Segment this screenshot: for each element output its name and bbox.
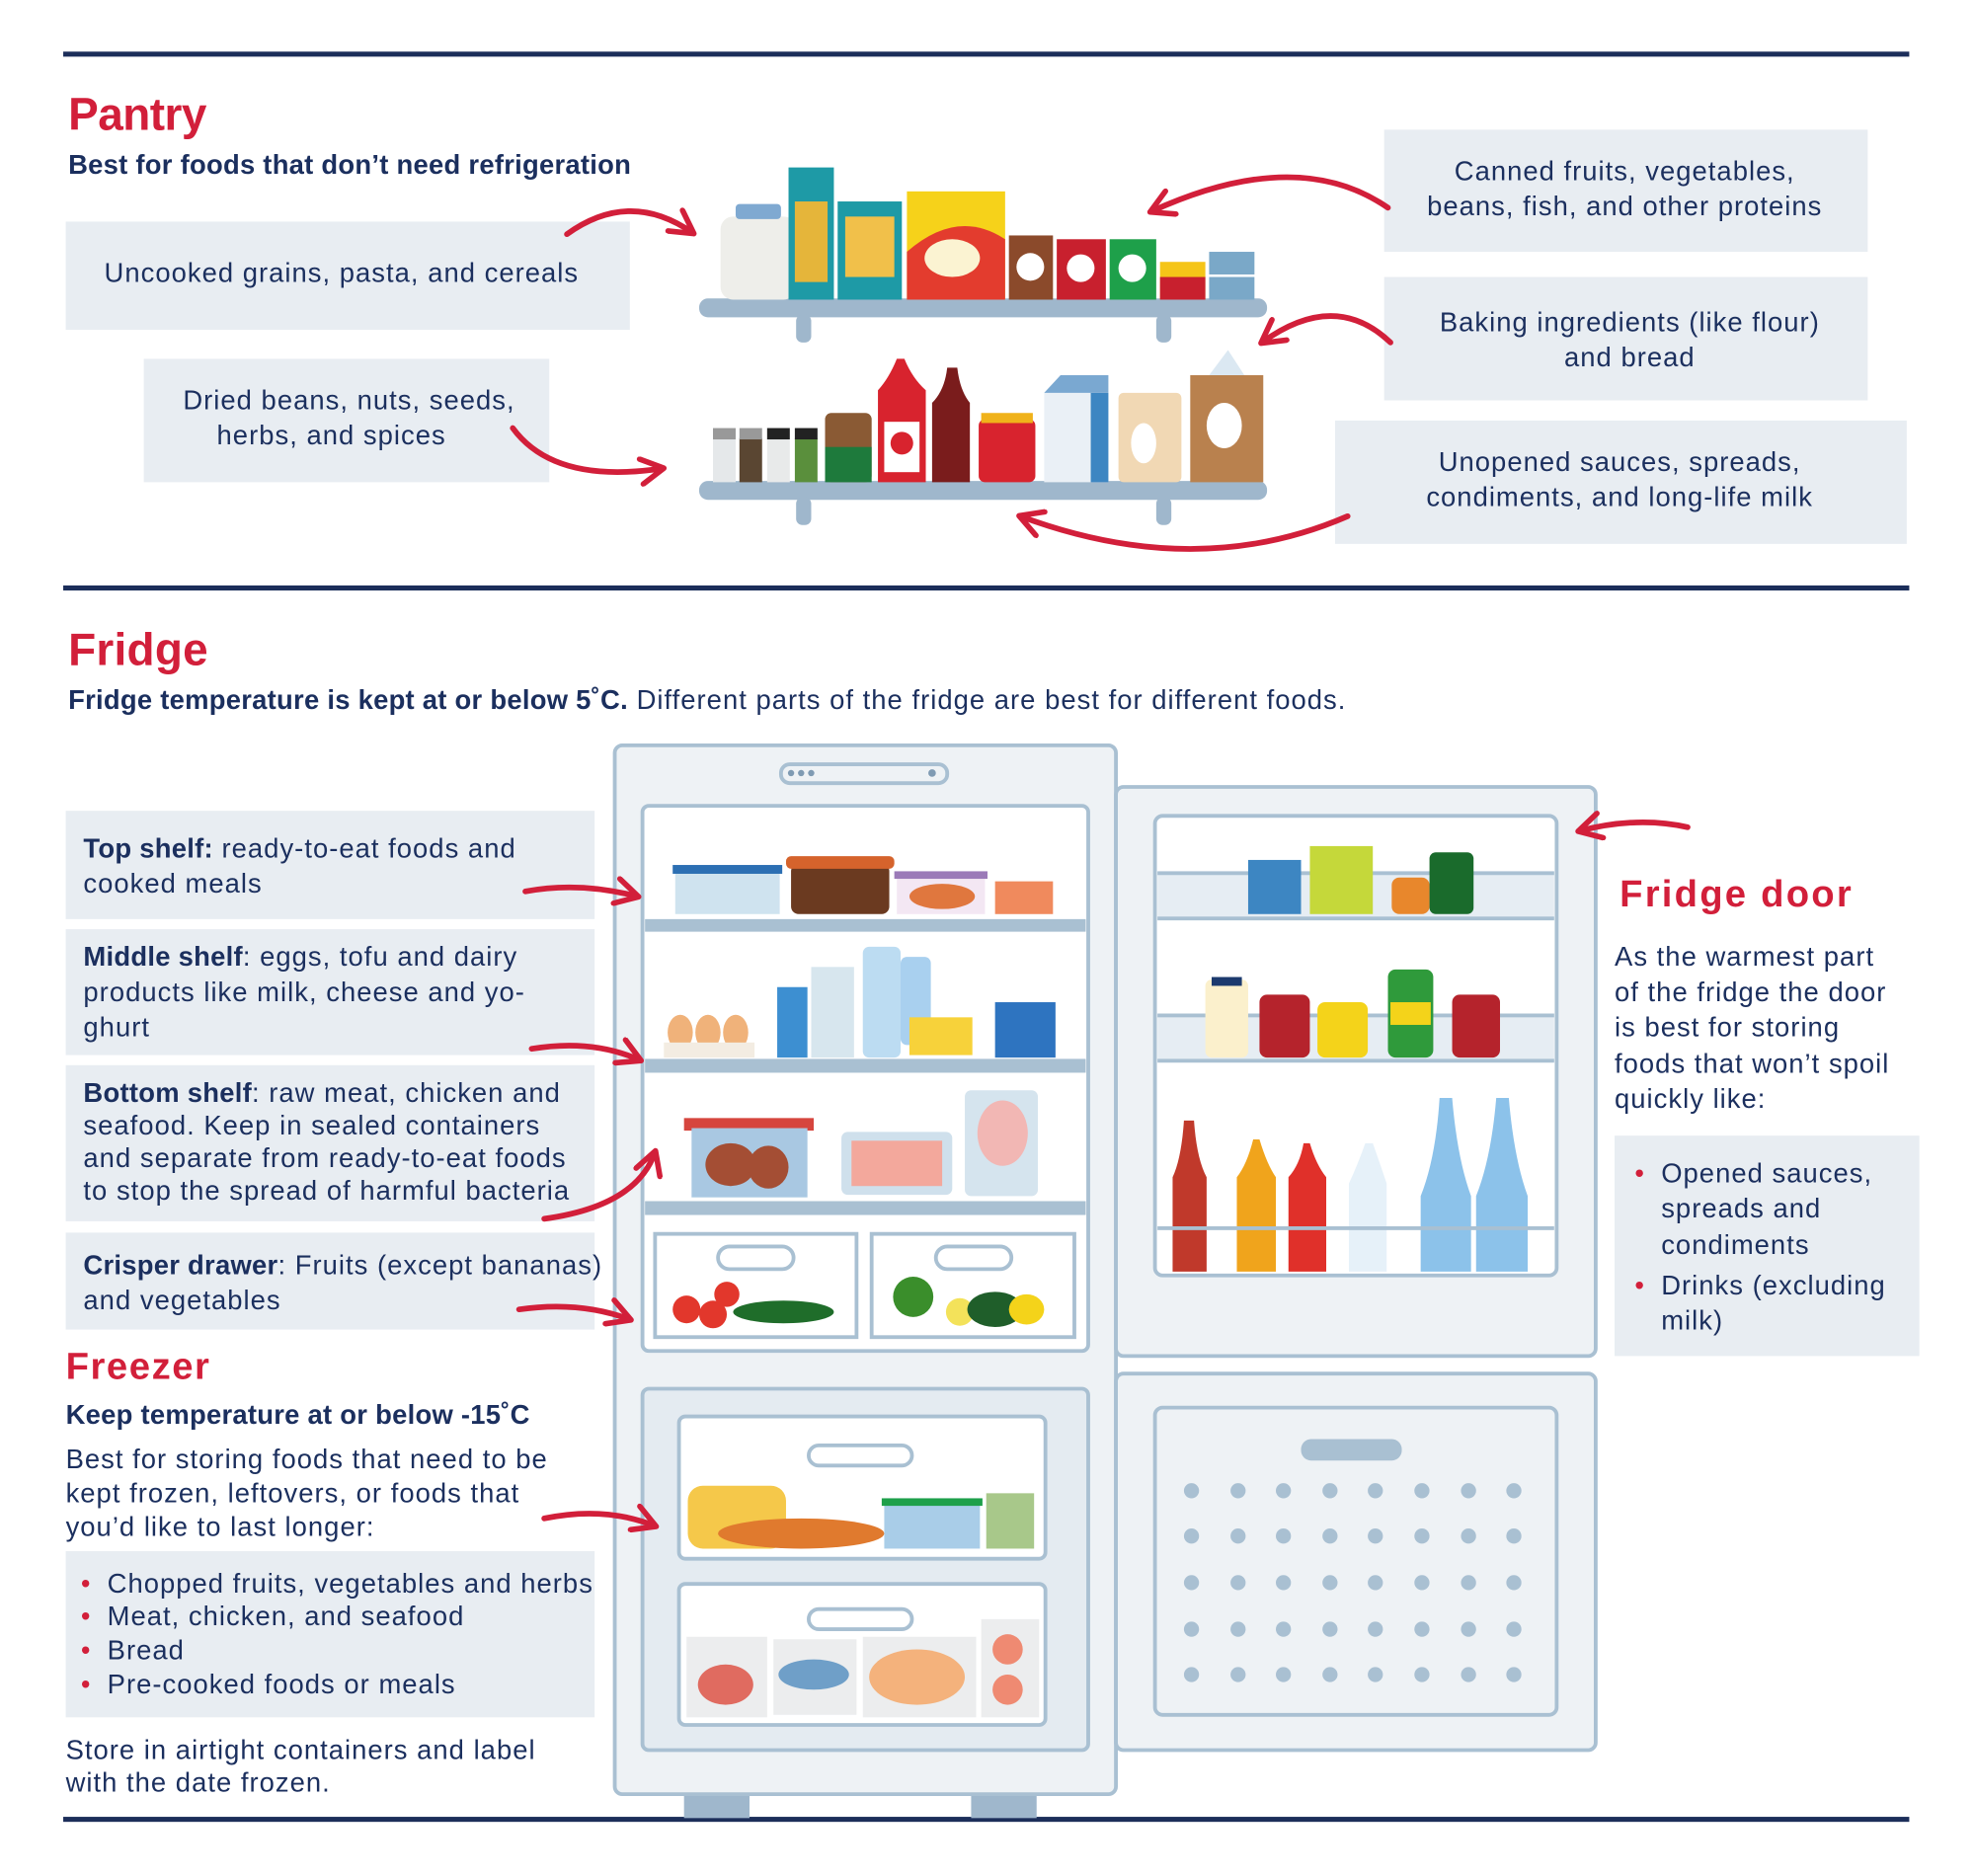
box: crisper: Crisper drawer: Fruits (except bananas) xyxy=(83,1249,602,1280)
fridge door text: of the fridge the door xyxy=(1615,977,1886,1007)
box: crisper xyxy=(66,1232,602,1330)
box: door list: • xyxy=(1634,1157,1645,1188)
pantry shelves xyxy=(699,298,1267,525)
box: bottom shelf: Bottom shelf: raw meat, chicken and xyxy=(83,1077,561,1108)
box: door list xyxy=(1615,1135,1920,1356)
box: baking xyxy=(1384,277,1867,401)
fridge heading xyxy=(68,623,1346,715)
box: dried beans xyxy=(144,358,549,482)
box: freezer list xyxy=(66,1551,594,1717)
pantry heading xyxy=(68,88,631,180)
freezer text: kept frozen, leftovers, or foods that xyxy=(66,1477,519,1508)
box: freezer list: • xyxy=(81,1669,92,1699)
arrows pantry xyxy=(513,177,1390,549)
fridge heading: Fridge temperature is kept at or below 5˚C. Different parts of the fridge are best for different foods. xyxy=(68,684,1346,715)
box: door list: Opened sauces, xyxy=(1661,1157,1872,1188)
box: bottom shelf: and separate from ready-to-eat foods xyxy=(83,1142,567,1173)
box: middle shelf xyxy=(66,929,594,1055)
fridge door text: quickly like: xyxy=(1615,1083,1766,1114)
box: bottom shelf: seafood. Keep in sealed containers xyxy=(83,1110,540,1140)
box: top shelf xyxy=(66,811,594,919)
box: middle shelf: Middle shelf: eggs, tofu and dairy xyxy=(83,941,517,972)
freezer note: Store in airtight containers and label xyxy=(66,1734,536,1764)
box: door list: Drinks (excluding xyxy=(1661,1270,1886,1300)
box: bottom shelf xyxy=(66,1065,594,1221)
box: canned: beans, fish, and other proteins xyxy=(1427,191,1822,221)
freezer note: with the date frozen. xyxy=(65,1767,331,1798)
box: freezer list: Bread xyxy=(108,1635,185,1666)
box: canned: Canned fruits, vegetables, xyxy=(1455,155,1795,186)
fridge door text: Fridge door xyxy=(1620,873,1852,915)
box: unopened sauces: Unopened sauces, spreads, xyxy=(1439,446,1801,477)
box: top shelf: Top shelf: ready-to-eat foods and xyxy=(83,832,516,863)
box: freezer list: • xyxy=(81,1568,92,1599)
box: door list: • xyxy=(1634,1270,1645,1300)
box: door list: spreads and xyxy=(1661,1193,1821,1223)
fridge door text xyxy=(1615,873,1889,1114)
box: dried beans: herbs, and spices xyxy=(217,420,446,450)
box: uncooked grains: Uncooked grains, pasta, and cereals xyxy=(105,258,579,288)
box: freezer list: Pre-cooked foods or meals xyxy=(108,1669,456,1699)
box: door list: condiments xyxy=(1661,1229,1810,1260)
box: middle shelf: products like milk, cheese and yo- xyxy=(83,977,525,1007)
box: middle shelf: ghurt xyxy=(83,1011,150,1042)
freezer text: Freezer xyxy=(66,1345,209,1387)
box: baking: and bread xyxy=(1564,342,1696,372)
pantry heading: Best for foods that don’t need refrigeration xyxy=(68,149,631,180)
box: freezer list: • xyxy=(81,1635,92,1666)
freezer text: Best for storing foods that need to be xyxy=(66,1444,548,1474)
box: uncooked grains xyxy=(66,221,630,330)
fridge food xyxy=(664,856,1056,1717)
pantry top shelf items xyxy=(721,168,1254,299)
fridge door text: is best for storing xyxy=(1615,1011,1840,1042)
box: dried beans: Dried beans, nuts, seeds, xyxy=(183,384,515,415)
pantry heading: Pantry xyxy=(68,88,207,139)
box: crisper: and vegetables xyxy=(83,1285,281,1315)
freezer text: Keep temperature at or below -15˚C xyxy=(66,1399,530,1430)
fridge heading: Fridge xyxy=(68,623,208,674)
arrows fridge xyxy=(519,822,1688,1526)
fridge door text: foods that won’t spoil xyxy=(1615,1048,1889,1078)
box: canned xyxy=(1384,129,1867,252)
freezer text: you’d like to last longer: xyxy=(66,1512,375,1542)
box: bottom shelf: to stop the spread of harmful bacteria xyxy=(83,1175,570,1206)
box: baking: Baking ingredients (like flour) xyxy=(1440,306,1820,337)
box: freezer list: • xyxy=(81,1601,92,1631)
box: unopened sauces xyxy=(1335,421,1907,544)
fridge door text: As the warmest part xyxy=(1615,941,1874,972)
freezer text xyxy=(66,1345,548,1542)
box: freezer list: Meat, chicken, and seafood xyxy=(108,1601,464,1631)
box: freezer list: Chopped fruits, vegetables and herbs xyxy=(108,1568,593,1599)
box: top shelf: cooked meals xyxy=(83,868,263,899)
pantry bottom shelf items xyxy=(713,350,1263,482)
fridge body xyxy=(615,745,1116,1818)
box: unopened sauces: condiments, and long-life milk xyxy=(1426,482,1813,512)
box: door list: milk) xyxy=(1661,1305,1723,1336)
freezer note xyxy=(65,1734,536,1798)
fridge door xyxy=(1116,787,1596,1750)
